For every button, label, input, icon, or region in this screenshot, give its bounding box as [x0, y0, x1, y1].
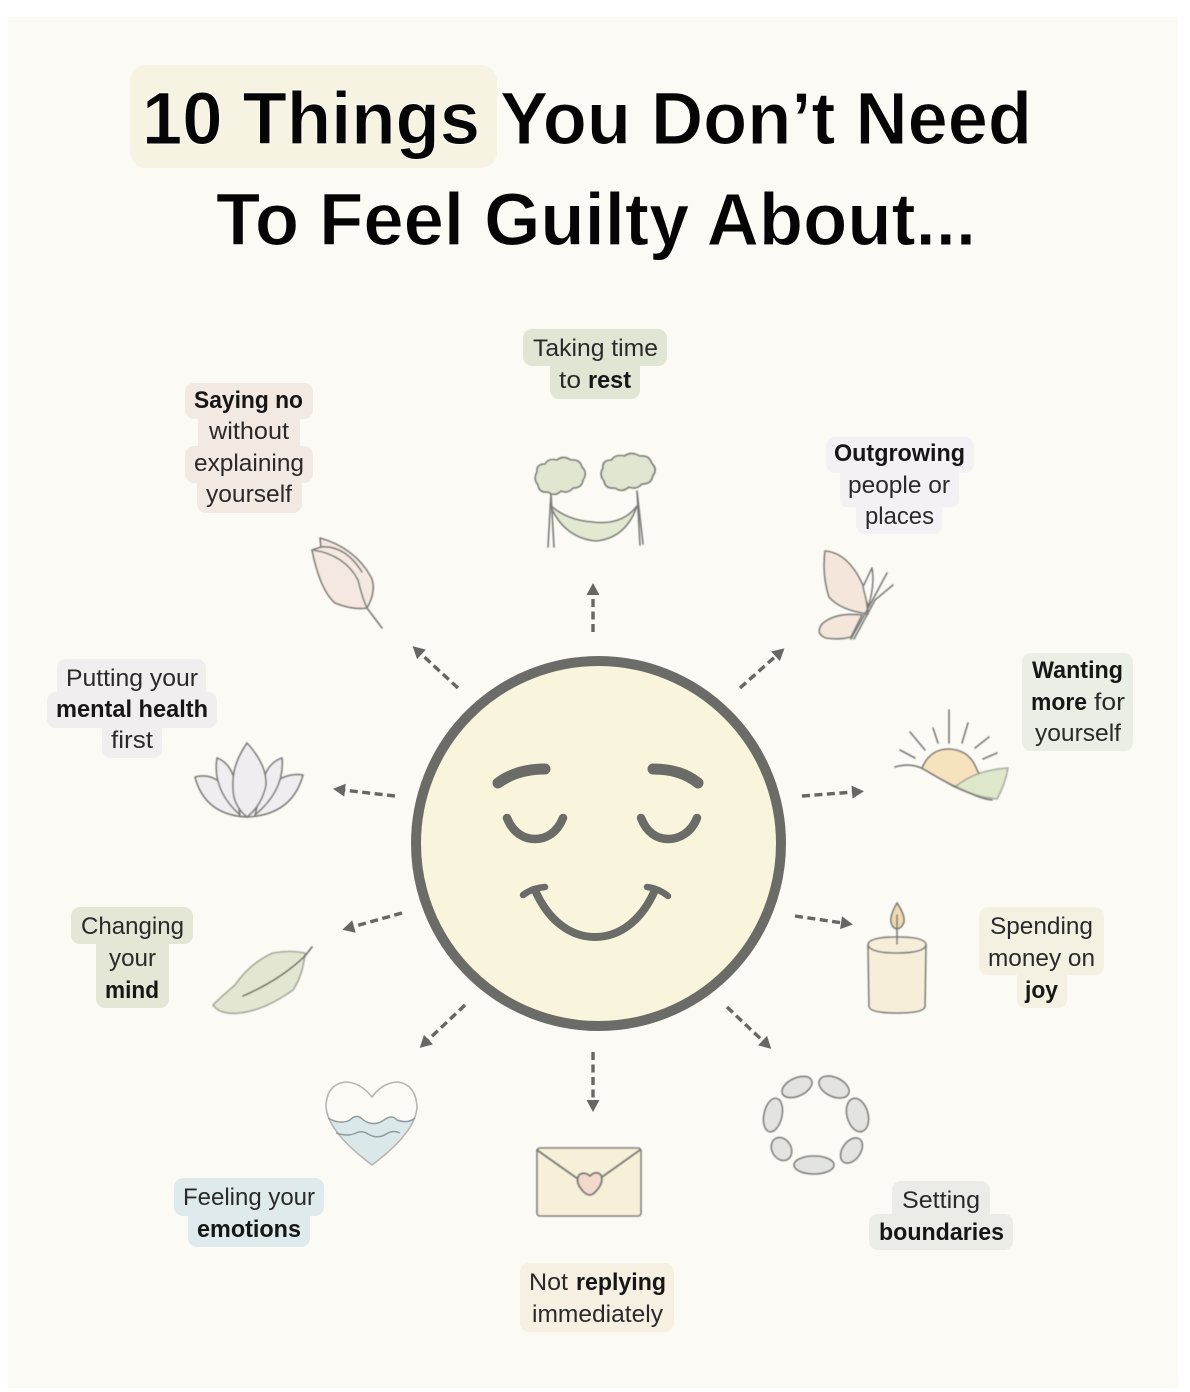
label: spending money [979, 907, 1104, 1008]
icon: hammock between trees [535, 454, 655, 547]
label: wanting more: for [1094, 689, 1125, 716]
label: outgrowing: people or [848, 472, 950, 499]
label: mental health [47, 659, 217, 758]
label: spending money: joy [1024, 977, 1059, 1004]
arrow: upper right [740, 655, 777, 688]
label: saying no: yourself [206, 481, 292, 508]
facial features [498, 769, 698, 937]
arrow: lower left 2 [427, 1005, 465, 1041]
label: feeling emotions: emotions [197, 1216, 301, 1243]
central smiling face [416, 661, 781, 1026]
label: not replying: replying [576, 1269, 666, 1296]
label: wanting more: Wanting [1032, 657, 1123, 684]
label: changing your mind: Changing [81, 913, 184, 940]
label: saying no [185, 383, 313, 513]
arrow: right [802, 792, 854, 796]
label: taking time to rest: rest [588, 367, 631, 394]
title line 1 rest: You Don’t Need [500, 77, 1032, 160]
label: spending money: money on [988, 945, 1095, 972]
arrow: up [591, 593, 595, 632]
label: setting boundaries: Setting [902, 1187, 980, 1214]
arrow: lower right 1 [795, 916, 843, 923]
label: mental health: mental health [56, 696, 208, 723]
label: spending money: Spending [990, 913, 1093, 940]
label: setting boundaries: boundaries [879, 1219, 1004, 1246]
label: wanting more: yourself [1035, 720, 1121, 747]
label: taking time to rest: Taking time [533, 335, 658, 362]
title [130, 65, 1032, 261]
icon: sunrise over hills [895, 710, 1008, 800]
label: feeling emotions: Feeling your [183, 1184, 315, 1211]
label: saying no: explaining [194, 450, 304, 477]
label: wanting more [1022, 653, 1133, 751]
label: changing your mind [71, 907, 193, 1008]
arrow: upper left [420, 653, 458, 688]
icon: tulip leaf [312, 538, 382, 628]
icon: candle [868, 903, 926, 1013]
arrow: lower right 2 [727, 1007, 764, 1042]
label: outgrowing: Outgrowing [834, 440, 965, 467]
label: saying no: without [208, 418, 289, 445]
label: outgrowing [826, 437, 974, 534]
title line 2: To Feel Guilty About... [216, 178, 976, 261]
arrow: down [591, 1052, 595, 1102]
label: mental health: Putting your [66, 665, 198, 692]
icon: ring of stones [761, 1072, 872, 1174]
label: saying no: Saying no [194, 387, 303, 414]
label: taking time to rest: to [559, 367, 581, 394]
heart waves [328, 1116, 415, 1137]
label: changing your mind: your [109, 945, 156, 972]
arrow: left [343, 790, 395, 796]
label: not replying: immediately [532, 1301, 663, 1328]
label: not replying: Not [529, 1269, 568, 1296]
face circle [416, 661, 781, 1026]
label: outgrowing: places [865, 503, 934, 530]
icon: butterfly [819, 551, 893, 639]
title line 1 highlighted: 10 Things [142, 77, 480, 160]
icon: heart with water [326, 1082, 417, 1165]
label: setting boundaries [869, 1181, 1013, 1250]
label: wanting more: more [1031, 689, 1087, 716]
arrow: lower left 1 [352, 913, 402, 927]
heart outline [326, 1082, 417, 1165]
heart water [328, 1116, 415, 1165]
label: mental health: first [111, 727, 153, 754]
label: not replying [520, 1263, 674, 1332]
title highlight [130, 65, 497, 168]
label: taking time to rest [523, 329, 667, 399]
icon: lotus flower [195, 743, 303, 817]
label: changing your mind: mind [105, 977, 159, 1004]
icon: envelope with heart [537, 1148, 641, 1216]
label: feeling emotions [174, 1178, 324, 1247]
icon: green leaf [213, 947, 312, 1013]
